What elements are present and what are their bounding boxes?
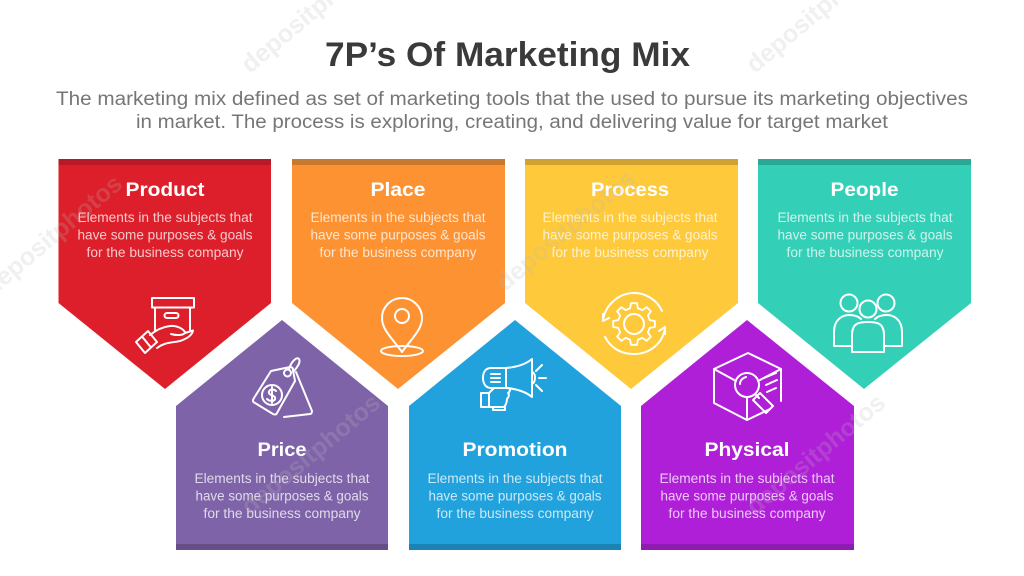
icon: box with magnifier (714, 353, 781, 420)
text: People description: have some purposes & goals (778, 228, 953, 242)
text: Place description: for the business company (320, 245, 477, 260)
heading: Process: Process (591, 180, 669, 201)
title: 7P’s Of Marketing Mix (325, 36, 690, 74)
text: Place description: Elements in the subjects that (310, 210, 486, 225)
icon: three people (834, 294, 902, 352)
heading: Product: Product (126, 180, 205, 201)
text: Product description: Elements in the subjects that (78, 210, 253, 225)
panel: Process (525, 159, 738, 389)
text: Place description: have some purposes & goals (310, 228, 486, 242)
watermark: depositphotos (741, 388, 891, 521)
text: Price description: Elements in the subjects that (194, 471, 370, 486)
text: Process description: Elements in the subjects that (542, 210, 718, 225)
panel: Promotion (409, 320, 621, 550)
panel: People (758, 159, 971, 389)
text: Promotion description (428, 471, 603, 521)
watermark (0, 0, 891, 521)
text: Price description (194, 471, 370, 521)
text: Physical description (660, 471, 835, 521)
panel: Physical (641, 320, 854, 550)
text: Physical description: for the business company (668, 506, 826, 521)
text: People description: for the business company (786, 245, 944, 260)
heading: Physical: Physical (704, 440, 790, 461)
text: Promotion description: for the business company (436, 506, 594, 521)
panel: Price (176, 320, 388, 550)
text: Place description (310, 210, 486, 260)
text: Process description (542, 210, 718, 260)
panel: Place (292, 159, 505, 389)
text: Promotion description: Elements in the subjects that (428, 471, 603, 486)
text: Physical description: have some purposes & goals (660, 488, 834, 504)
text: Process description: for the business company (552, 245, 709, 260)
text: People description (778, 210, 953, 260)
watermark: depositphotos (491, 164, 641, 297)
text: People description: Elements in the subjects that (778, 210, 953, 225)
subtitle: in market. The process is exploring, creating, and delivering value for target market (136, 112, 889, 133)
subtitle (56, 89, 968, 133)
text: Price description: have some purposes & goals (196, 488, 369, 504)
heading: People: People (830, 180, 898, 201)
text: Product description: for the business company (86, 245, 244, 260)
text: Process description: have some purposes & goals (542, 228, 718, 242)
panel: Product (58, 159, 271, 389)
heading: Place: Place (370, 180, 426, 201)
icon: megaphone (481, 359, 546, 410)
heading: Price: Price (258, 440, 306, 461)
icon: gear with arrows (603, 293, 665, 354)
text: Physical description: Elements in the subjects that (660, 471, 835, 486)
text: Product description (78, 210, 253, 260)
watermark: depositphotos (236, 388, 386, 521)
text: Price description: for the business company (204, 506, 361, 521)
icon: map pin (381, 298, 423, 356)
subtitle: The marketing mix defined as set of marketing tools that the used to pursue its marketing objectives (56, 89, 968, 110)
heading: Promotion: Promotion (462, 440, 568, 461)
text: Product description: have some purposes & goals (78, 228, 253, 242)
text: Promotion description: have some purposes & goals (428, 488, 602, 504)
icon: price tags (253, 358, 312, 417)
icon: box in hand (136, 298, 194, 353)
